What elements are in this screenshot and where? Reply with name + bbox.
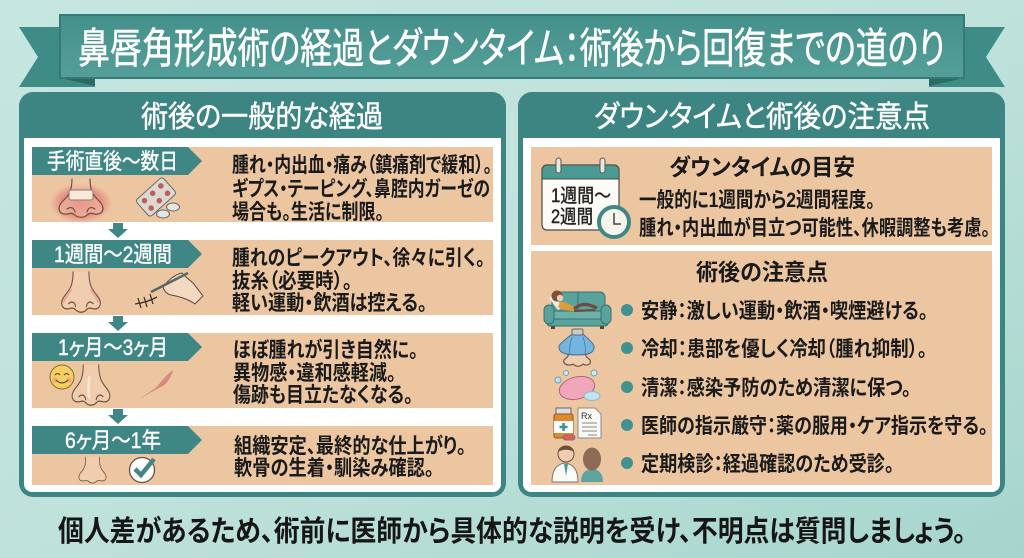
icon: nose — [62, 272, 100, 312]
bullet and text: cooling: 冷却：患部を優しく冷却（腫れ抑制）。 — [641, 338, 927, 361]
icon: hand removing stitches — [135, 273, 203, 308]
row 3: 異物感・違和感軽減。 — [233, 361, 396, 385]
icon: fading scar — [140, 370, 173, 399]
heading: post-op course: 術後の一般的な経過 — [141, 101, 383, 134]
icon: smiling face — [50, 365, 74, 389]
icon: ice pack on nose — [559, 329, 594, 366]
row 4: 軟骨の生着・馴染み確認。 — [234, 457, 434, 480]
icon: medicine and prescription — [554, 408, 601, 440]
row 1: 場合も。生活に制限。 — [232, 201, 384, 224]
row 2: 1週間〜2週間 — [54, 242, 172, 267]
arrow — [108, 409, 128, 424]
row 3: 傷跡も目立たなくなる。 — [233, 384, 413, 407]
box: downtime guide: ダウンタイムの目安 — [669, 154, 855, 180]
row 3: 1ヶ月〜3ヶ月 — [58, 335, 168, 360]
row 1: ギプス・テーピング、鼻腔内ガーゼの — [232, 177, 490, 201]
icon: calendar and clock: 2週間 — [551, 206, 593, 228]
icon: calendar and clock: 1週間〜 — [551, 185, 611, 207]
bullet and text: rest: 安静：激しい運動・飲酒・喫煙避ける。 — [641, 300, 928, 323]
box: downtime guide — [531, 147, 992, 245]
box: downtime guide: 一般的に1週間から2週間程度。 — [639, 189, 875, 212]
row 1: 手術直後〜数日 — [47, 149, 178, 174]
row 4: 6ヶ月〜1年 — [65, 428, 161, 453]
row 1: 腫れ・内出血・痛み（鎮痛剤で緩和）。 — [232, 154, 492, 177]
icon: nose — [72, 365, 110, 405]
row 3: ほぼ腫れが引き自然に。 — [233, 338, 418, 362]
bullet and text: hygiene: 清潔：感染予防のため清潔に保つ。 — [641, 376, 911, 400]
bullet and text: regular checkups: 定期検診：経過確認のため受診。 — [641, 453, 894, 476]
box: precautions: 術後の注意点 — [696, 259, 828, 285]
icon: doctor and patient — [552, 446, 603, 482]
row 2 — [32, 240, 493, 315]
icon: check mark — [130, 458, 154, 482]
title banner — [19, 15, 1005, 87]
row 1 — [32, 147, 493, 224]
icon: soap — [555, 370, 600, 403]
panel: post-op course — [19, 92, 506, 497]
box: precautions — [531, 251, 992, 485]
row 4: 組織安定、最終的な仕上がり。 — [234, 434, 466, 458]
arrow — [108, 316, 128, 331]
heading: downtime and precautions: ダウンタイムと術後の注意点 — [594, 101, 930, 134]
icon: calendar and clock — [542, 158, 629, 237]
icon: pills — [135, 177, 180, 218]
panel: downtime and precautions — [518, 92, 1005, 497]
icon: medicine and prescription: Rx — [581, 411, 592, 421]
arrow — [108, 223, 128, 238]
row 2: 軽い運動・飲酒は控える。 — [232, 292, 427, 315]
row 2: 抜糸（必要時）。 — [232, 270, 352, 293]
icon: nose — [79, 457, 106, 483]
icon: resting on sofa — [544, 290, 611, 329]
row 4 — [32, 426, 493, 485]
icon: swollen nose with bandage — [50, 179, 112, 223]
row 2: 腫れのピークアウト、徐々に引く。 — [232, 247, 485, 270]
row 3 — [32, 333, 493, 408]
